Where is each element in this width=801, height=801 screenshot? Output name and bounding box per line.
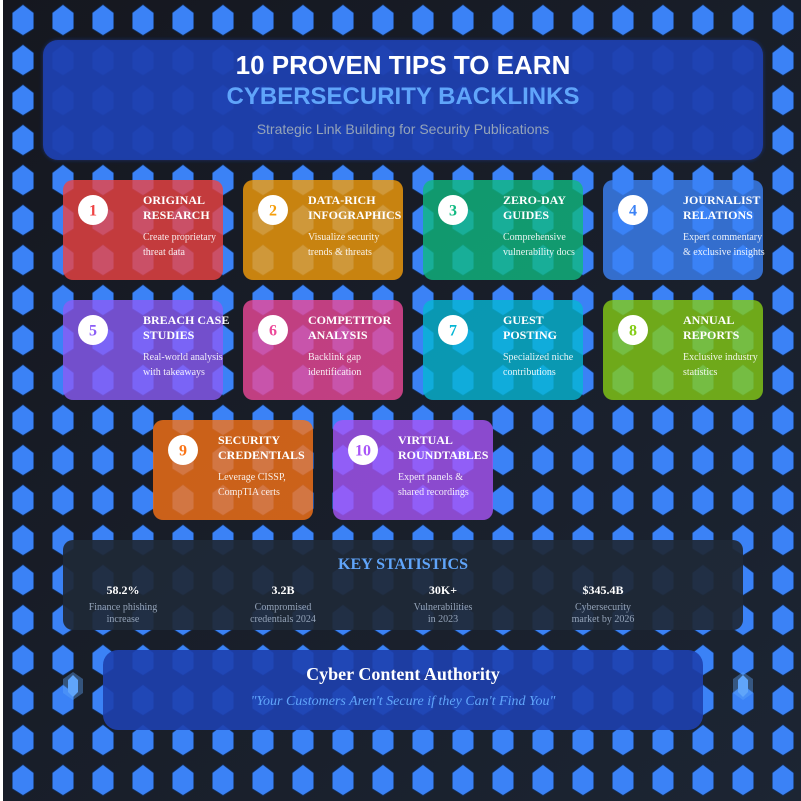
card 2: data-rich infographics: 2 [269, 202, 277, 220]
card 8: annual reports: statistics [683, 367, 718, 378]
card 6: competitor analysis: identification [308, 367, 361, 378]
card 9: security credentials: CompTIA certs [218, 487, 280, 498]
icon: left small hexagon [63, 672, 83, 700]
card 3: zero-day guides [423, 180, 583, 280]
heading: cybersecurity backlinks: CYBERSECURITY BACKLINKS [227, 83, 579, 110]
card 5: breach case studies: STUDIES [143, 328, 195, 342]
stat: compromised credentials: credentials 2024 [250, 614, 316, 625]
card 4: journalist relations: JOURNALIST [683, 193, 760, 207]
card 5: breach case studies [63, 300, 229, 400]
subtitle: Strategic Link Building for Security Publications [257, 121, 549, 137]
card 10: virtual roundtables: VIRTUAL [398, 433, 453, 447]
stat: market size: Cybersecurity [575, 602, 631, 613]
card 10: virtual roundtables [333, 420, 493, 520]
card 4: journalist relations: & exclusive insights [683, 247, 765, 258]
card 1: original research: Create proprietary [143, 232, 216, 243]
card 2: data-rich infographics [243, 180, 403, 280]
icon: right small hexagon [733, 672, 753, 700]
card 4: journalist relations: RELATIONS [683, 208, 753, 222]
stat: finance phishing [89, 583, 157, 625]
card 9: security credentials [153, 420, 313, 520]
card 6: competitor analysis: COMPETITOR [308, 313, 391, 327]
stat: finance phishing: increase [107, 614, 140, 625]
card 1: original research: ORIGINAL [143, 193, 205, 207]
footer tagline: "Your Customers Aren't Secure if they Can't Find You" [251, 694, 555, 709]
card 8: annual reports: REPORTS [683, 328, 740, 342]
card 10: virtual roundtables: shared recordings [398, 487, 469, 498]
card 6: competitor analysis: ANALYSIS [308, 328, 368, 342]
card 1: original research: RESEARCH [143, 208, 210, 222]
heading: key statistics: KEY STATISTICS [338, 556, 468, 573]
card 1: original research [63, 180, 223, 280]
stat: market size [572, 583, 634, 625]
card 4: journalist relations: Expert commentary [683, 232, 762, 243]
card 3: zero-day guides: GUIDES [503, 208, 549, 222]
card 2: data-rich infographics: INFOGRAPHICS [308, 208, 402, 222]
card 5: breach case studies: with takeaways [143, 367, 205, 378]
card 3: zero-day guides: 3 [449, 202, 457, 220]
stat: market size: market by 2026 [572, 614, 634, 625]
card 10: virtual roundtables: 10 [355, 442, 371, 460]
stat: vulnerabilities: in 2023 [428, 614, 458, 625]
card 7: guest posting: POSTING [503, 328, 557, 342]
card 7: guest posting: 7 [449, 322, 457, 340]
card 10: virtual roundtables: ROUNDTABLES [398, 448, 489, 462]
card 8: annual reports: 8 [629, 322, 637, 340]
card 1: original research: threat data [143, 247, 185, 258]
card 7: guest posting: contributions [503, 367, 556, 378]
card 3: zero-day guides: vulnerability docs [503, 247, 575, 258]
stat: compromised credentials: Compromised [255, 602, 311, 613]
footer title: Cyber Content Authority [306, 664, 500, 684]
card 9: security credentials: SECURITY [218, 433, 280, 447]
stat: vulnerabilities: Vulnerabilities [414, 602, 473, 613]
card 6: competitor analysis: Backlink gap [308, 352, 361, 363]
title: 10 PROVEN TIPS TO EARN [236, 50, 570, 80]
card 8: annual reports: ANNUAL [683, 313, 734, 327]
card 3: zero-day guides: Comprehensive [503, 232, 566, 243]
card 9: security credentials: Leverage CISSP, [218, 472, 286, 483]
card 9: security credentials: 9 [179, 442, 187, 460]
card 5: breach case studies: BREACH CASE [143, 313, 229, 327]
card 5: breach case studies: Real-world analysis [143, 352, 223, 363]
stat: vulnerabilities [414, 583, 473, 625]
card 4: journalist relations: 4 [629, 202, 637, 220]
card 10: virtual roundtables: Expert panels & [398, 472, 463, 483]
card 7: guest posting: Specialized niche [503, 352, 574, 363]
stat: market size: $345.4B [582, 583, 624, 597]
card 8: annual reports [603, 300, 763, 400]
card 2: data-rich infographics: trends & threats [308, 247, 372, 258]
card 6: competitor analysis: 6 [269, 322, 277, 340]
card 2: data-rich infographics: DATA-RICH [308, 193, 376, 207]
card 9: security credentials: CREDENTIALS [218, 448, 305, 462]
panel: footer [103, 650, 703, 730]
card 7: guest posting [423, 300, 583, 400]
card 4: journalist relations [603, 180, 765, 280]
card 2: data-rich infographics: Visualize security [308, 232, 379, 243]
stat: compromised credentials: 3.2B [271, 583, 295, 597]
stat: finance phishing: 58.2% [106, 583, 140, 597]
stat: finance phishing: Finance phishing [89, 602, 157, 613]
card 8: annual reports: Exclusive industry [683, 352, 758, 363]
stat: compromised credentials [250, 583, 316, 625]
card 7: guest posting: GUEST [503, 313, 544, 327]
panel: header [43, 40, 763, 160]
card 3: zero-day guides: ZERO-DAY [503, 193, 566, 207]
stat: vulnerabilities: 30K+ [429, 583, 457, 597]
card 6: competitor analysis [243, 300, 403, 400]
panel: key statistics [63, 540, 743, 630]
card 1: original research: 1 [89, 202, 97, 220]
card 5: breach case studies: 5 [89, 322, 97, 340]
